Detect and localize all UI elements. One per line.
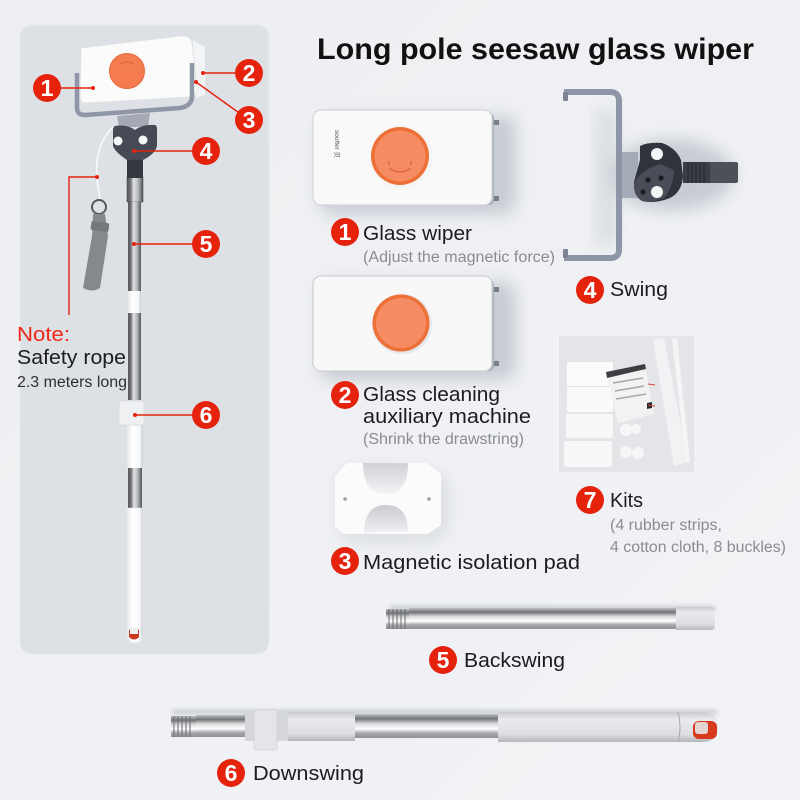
label: downswing: 6 — [225, 760, 237, 786]
label: downswing: Downswing — [253, 762, 364, 785]
safety rope note: 2.3 meters long — [17, 374, 127, 391]
label: kits: (4 rubber strips, — [610, 517, 722, 534]
wiper mounted on holder — [77, 36, 205, 115]
number badge 4 — [192, 137, 220, 165]
label: backswing — [429, 646, 565, 674]
label: downswing — [217, 759, 364, 787]
number badge 3 — [235, 106, 263, 134]
number badge 4: 4 — [200, 138, 213, 164]
label: glass wiper: (Adjust the magnetic force) — [363, 249, 555, 266]
label: kits: Kits — [610, 489, 643, 512]
glass wiper device — [313, 110, 516, 214]
auxiliary machine device — [313, 276, 516, 380]
safety rope and wrist strap — [83, 127, 113, 290]
number badge 3: 3 — [243, 107, 255, 133]
number badge 2: 2 — [243, 60, 255, 86]
number badge 5: 5 — [200, 231, 213, 257]
number badge 1: 1 — [41, 75, 54, 101]
kits bag — [558, 335, 695, 473]
downswing pole — [171, 710, 718, 750]
safety rope note: Safety rope — [17, 346, 126, 369]
number badge 6: 6 — [200, 402, 212, 428]
backswing pole — [386, 606, 715, 630]
glass wiper device: soofter 贝 — [333, 130, 341, 158]
number badge 5 — [192, 230, 220, 258]
label: auxiliary machine — [331, 381, 531, 448]
label: isolation pad: Magnetic isolation pad — [363, 551, 580, 574]
label: auxiliary machine: auxiliary machine — [363, 405, 531, 428]
label: isolation pad — [331, 547, 580, 575]
label: swing — [576, 276, 668, 304]
title: Long pole seesaw glass wiper — [317, 33, 754, 66]
label: swing: 4 — [584, 277, 597, 303]
telescopic pole — [119, 177, 144, 643]
label: kits: 7 — [584, 487, 596, 513]
swing bracket — [563, 92, 738, 258]
label: backswing: 5 — [437, 647, 450, 673]
label: glass wiper — [331, 218, 555, 266]
magnetic isolation pad — [335, 463, 448, 542]
label: glass wiper: 1 — [339, 219, 352, 245]
callout dots — [91, 71, 205, 417]
callout lines — [47, 73, 249, 415]
number badge 1 — [33, 74, 61, 102]
label: backswing: Backswing — [464, 649, 565, 672]
safety rope note: Note: — [17, 323, 70, 346]
label: auxiliary machine: (Shrink the drawstring) — [363, 431, 524, 448]
label: glass wiper: Glass wiper — [363, 222, 472, 245]
panel: assembled device — [17, 25, 269, 654]
label: isolation pad: 3 — [339, 548, 351, 574]
number badge 6 — [192, 401, 220, 429]
label: swing: Swing — [610, 278, 668, 301]
label: kits: 4 cotton cloth, 8 buckles) — [610, 539, 786, 556]
safety rope note — [17, 323, 127, 391]
number badge 2 — [235, 59, 263, 87]
swing head — [113, 113, 157, 178]
label: auxiliary machine: 2 — [339, 382, 351, 408]
label: kits — [576, 486, 786, 556]
label: auxiliary machine: Glass cleaning — [363, 383, 500, 406]
